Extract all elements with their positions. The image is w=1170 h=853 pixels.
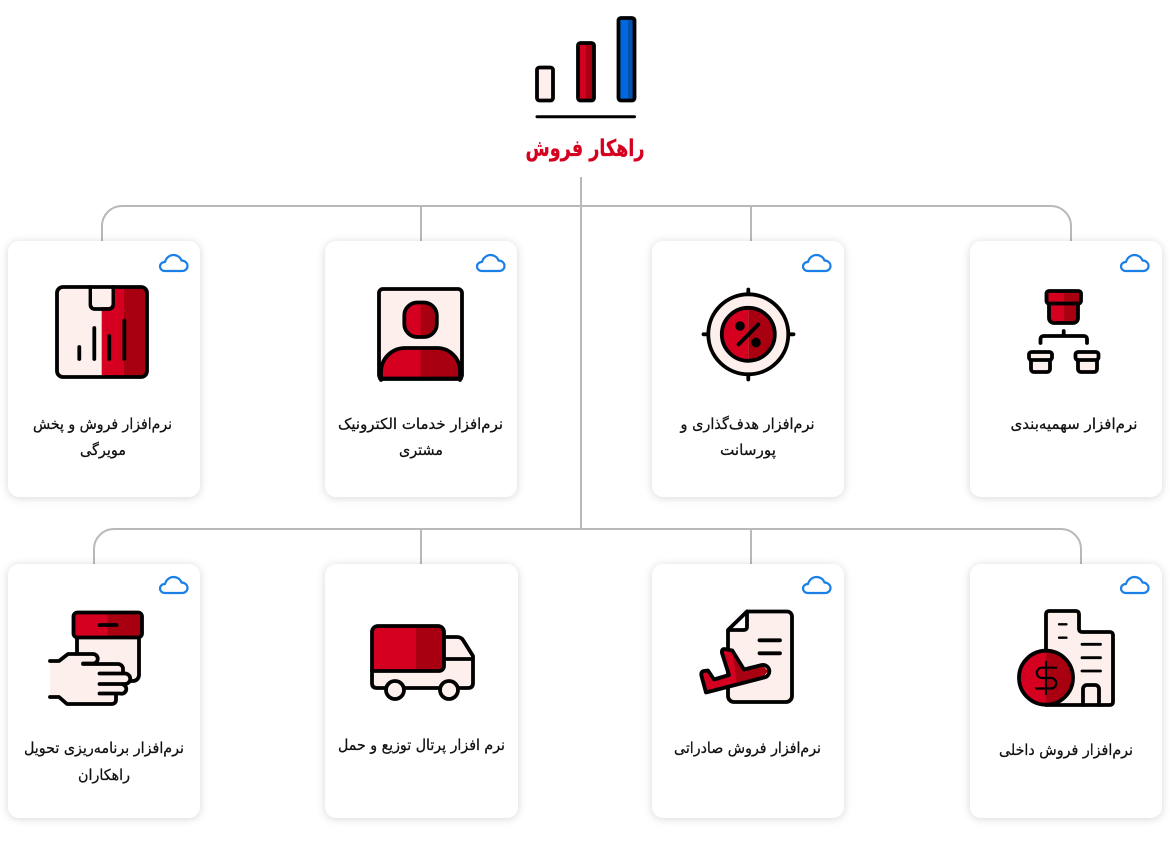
panel: export sales software: [652, 564, 844, 818]
panel: customer e-services software: [325, 241, 517, 497]
label line 2: مویرگی: [80, 441, 126, 459]
label: نرم‌افزار فروش صادراتی: [674, 739, 821, 757]
panel: target and commission software: [652, 241, 844, 497]
label: نرم‌افزار فروش داخلی: [999, 741, 1133, 759]
label: نرم‌افزار فروش و پخش: [33, 415, 172, 434]
icon: document with airplane: [701, 612, 792, 702]
icon: bar chart: [537, 18, 634, 117]
icon: person portrait: [379, 289, 462, 380]
label: نرم‌افزار برنامه‌ریزی تحویل: [24, 739, 184, 757]
label: نرم افزار پرتال توزیع و حمل: [338, 736, 505, 755]
icon: cloud: [160, 255, 188, 271]
label line 2: پورسانت: [720, 441, 776, 460]
header: sales solution: [526, 16, 644, 162]
icon: percent target: [704, 290, 794, 380]
icon: box with bars: [57, 287, 147, 377]
panel: dealer delivery planning software: [8, 564, 200, 818]
icon: cloud: [160, 577, 188, 593]
label: نرم‌افزار سهمیه‌بندی: [1010, 415, 1138, 433]
icon: cloud: [477, 255, 504, 271]
icon: hierarchy of boxes: [1029, 291, 1098, 372]
panel: quota allocation software: [970, 241, 1162, 497]
label: نرم‌افزار خدمات الکترونیک: [338, 415, 503, 433]
icon: cloud: [1121, 255, 1148, 271]
label line 2: راهکاران: [78, 766, 130, 784]
panel: capillary sales and distribution software: [8, 241, 200, 497]
icon: building with dollar coin: [1019, 611, 1113, 705]
panel: domestic sales software: [970, 564, 1162, 818]
panel: distribution portal software: [325, 564, 518, 818]
title: راهکار فروش: [526, 136, 644, 162]
icon: cloud: [803, 255, 830, 271]
icon: cloud: [1121, 577, 1148, 593]
label: نرم‌افزار هدف‌گذاری و: [680, 415, 814, 433]
icon: hand holding box: [50, 612, 142, 704]
icon: cloud: [803, 577, 830, 593]
icon: delivery truck: [372, 626, 473, 699]
label line 2: مشتری: [399, 441, 443, 459]
